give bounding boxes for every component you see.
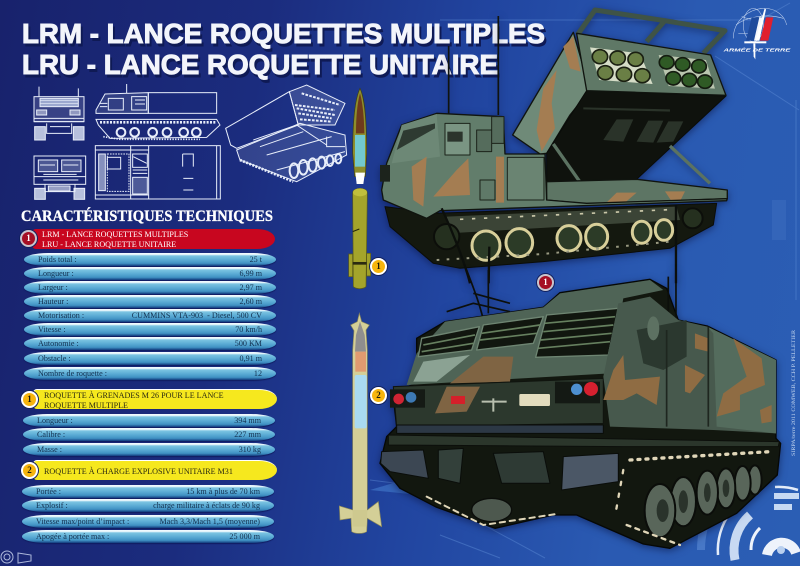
logo text: ARMÉE DE TERRE	[722, 46, 792, 53]
title: LRU - LANCE ROQUETTE UNITAIRE	[22, 49, 498, 80]
panel: LRM specifications	[19, 229, 276, 382]
upper front plate	[407, 280, 663, 385]
row: vitesse	[24, 323, 276, 336]
row: largeur	[24, 281, 276, 294]
badge 1 yellow: 1	[27, 394, 32, 404]
row: portée	[22, 485, 274, 498]
heading: caractéristiques techniques: CARACTÉRISTIQUES TECHNIQUES	[21, 208, 273, 225]
track	[385, 203, 717, 268]
row: longueur: 394 mm	[234, 416, 261, 425]
row: nombre de roquette: 12	[254, 369, 262, 378]
badge: vehicle: 1	[543, 277, 548, 287]
row: motorisation: Motorisation :	[38, 311, 84, 320]
logo: Armée de Terre	[722, 8, 792, 60]
row: nombre de roquette	[24, 367, 276, 380]
logo flag	[744, 8, 773, 59]
badge: rocket 1	[370, 258, 387, 275]
footer icons	[0, 550, 32, 564]
badge 1 red	[20, 230, 37, 247]
launcher pod side	[513, 32, 590, 154]
yellow heading band 1	[33, 389, 277, 409]
badge 1 red: 1	[26, 233, 31, 243]
right side of hull	[603, 297, 776, 433]
row: apogée: Apogée à portée max :	[36, 532, 109, 541]
rocket tubes right	[659, 55, 715, 89]
row: longueur: 6,99 m	[240, 269, 262, 278]
blueprint: rear view	[34, 156, 86, 199]
row: largeur: 2,97 m	[240, 283, 262, 292]
row: obstacle: Obstacle :	[38, 354, 71, 363]
row: vitesse max	[22, 515, 274, 528]
row: explosif	[22, 499, 274, 512]
row: longueur	[23, 414, 275, 427]
row: poids total: Poids total :	[38, 255, 77, 264]
launcher front face	[577, 33, 726, 95]
row: motorisation: CUMMINS VTA-903 - Diesel, 500 CV	[132, 311, 262, 320]
row: hauteur: 2,60 m	[240, 297, 262, 306]
row: vitesse: Vitesse :	[38, 325, 66, 334]
row: calibre	[23, 428, 275, 441]
badge 2 yellow: 2	[27, 465, 32, 475]
row: obstacle	[24, 352, 276, 365]
row: vitesse max: Mach 3,3/Mach 1,5 (moyenne)	[160, 517, 260, 526]
blueprint: top view	[95, 146, 220, 199]
row: poids total	[24, 253, 276, 266]
row: explosif: charge militaire à éclats de 90 kg	[153, 501, 260, 510]
rocket 1 cutaway	[353, 88, 367, 184]
badge: rocket 2	[370, 387, 387, 404]
cables	[442, 205, 676, 283]
title: LRU - LANCE ROQUETTE UNITAIRE	[24, 52, 500, 83]
badge: rocket 2: 2	[376, 390, 381, 400]
row: calibre: 227 mm	[234, 430, 261, 439]
row: apogée: 25 000 m	[229, 532, 260, 541]
right road wheels	[645, 465, 762, 537]
row: apogée	[22, 530, 274, 543]
badge: rocket 1: 1	[376, 261, 381, 271]
title: LRM - LANCE ROQUETTES MULTIPLES	[24, 21, 547, 52]
row: hauteur	[24, 295, 276, 308]
blueprint: front view	[34, 87, 84, 140]
row: obstacle: 0,91 m	[240, 354, 262, 363]
launcher frame	[577, 10, 725, 53]
yellow heading band 1: ROQUETTE À GRENADES M 26 POUR LE LANCE	[44, 391, 224, 400]
row: masse	[23, 443, 275, 456]
bumper rail	[397, 425, 603, 433]
row: vitesse: 70 km/h	[235, 325, 262, 334]
row: portée: 15 km à plus de 70 km	[186, 487, 260, 496]
badge: vehicle	[537, 274, 554, 291]
row: calibre: Calibre :	[37, 430, 65, 439]
row: portée: Portée :	[36, 487, 61, 496]
badge 1 yellow	[21, 391, 38, 408]
blueprint: side view	[96, 84, 220, 139]
badge 2 yellow	[21, 462, 38, 479]
road wheels	[472, 220, 673, 260]
rocket tubes left	[590, 47, 653, 84]
red heading band: LRU - LANCE ROQUETTE UNITAIRE	[42, 240, 176, 249]
yellow heading band 2: ROQUETTE À CHARGE EXPLOSIVE UNITAIRE M31	[44, 467, 233, 476]
sprockets	[434, 208, 703, 249]
row: hauteur: Hauteur :	[38, 297, 68, 306]
credit line: SIRPA/terre 2011 COMWEB, CCH P. PELLETIER	[791, 330, 797, 456]
logo globe	[733, 8, 787, 42]
rocket 1 launch tube	[349, 188, 371, 289]
launcher underside	[547, 91, 726, 182]
cables on roof	[447, 270, 676, 327]
silhouette shadow and lower hull	[380, 279, 781, 548]
panel: M31 rocket	[20, 460, 277, 544]
row: longueur	[24, 267, 276, 280]
yellow heading band 2	[33, 460, 277, 480]
row: autonomie: Autonomie :	[38, 339, 79, 348]
row: largeur: Largeur :	[38, 283, 68, 292]
left wheel under hull	[472, 498, 512, 522]
panel: M26 rocket	[20, 389, 277, 458]
row: masse: Masse :	[37, 445, 62, 454]
row: nombre de roquette: Nombre de roquette :	[38, 369, 107, 378]
grille louvres	[418, 308, 618, 357]
title	[22, 18, 547, 83]
row: longueur: Longueur :	[38, 269, 74, 278]
cab	[382, 113, 727, 218]
track links	[437, 242, 670, 260]
deck	[547, 179, 727, 204]
row: poids total: 25 t	[250, 255, 262, 264]
title: LRM - LANCE ROQUETTES MULTIPLES	[22, 18, 545, 49]
mudguards	[381, 448, 618, 490]
row: longueur: Longueur :	[37, 416, 73, 425]
row: vitesse max: Vitesse max/point d’impact :	[36, 517, 129, 526]
row: autonomie	[24, 337, 276, 350]
red heading band: LRM - LANCE ROQUETTES MULTIPLES	[42, 230, 188, 239]
yellow heading band 1: ROQUETTE MULTIPLE	[44, 401, 128, 410]
red heading band	[32, 229, 275, 249]
row: autonomie: 500 KM	[235, 339, 262, 348]
antennas	[449, 16, 498, 115]
blueprint: perspective view	[226, 85, 347, 182]
launcher struts	[553, 144, 710, 187]
row: explosif: Explosif :	[36, 501, 68, 510]
front panel with lights	[393, 378, 603, 427]
track pads	[427, 452, 770, 545]
row: motorisation	[24, 309, 276, 322]
row: masse: 310 kg	[239, 445, 261, 454]
